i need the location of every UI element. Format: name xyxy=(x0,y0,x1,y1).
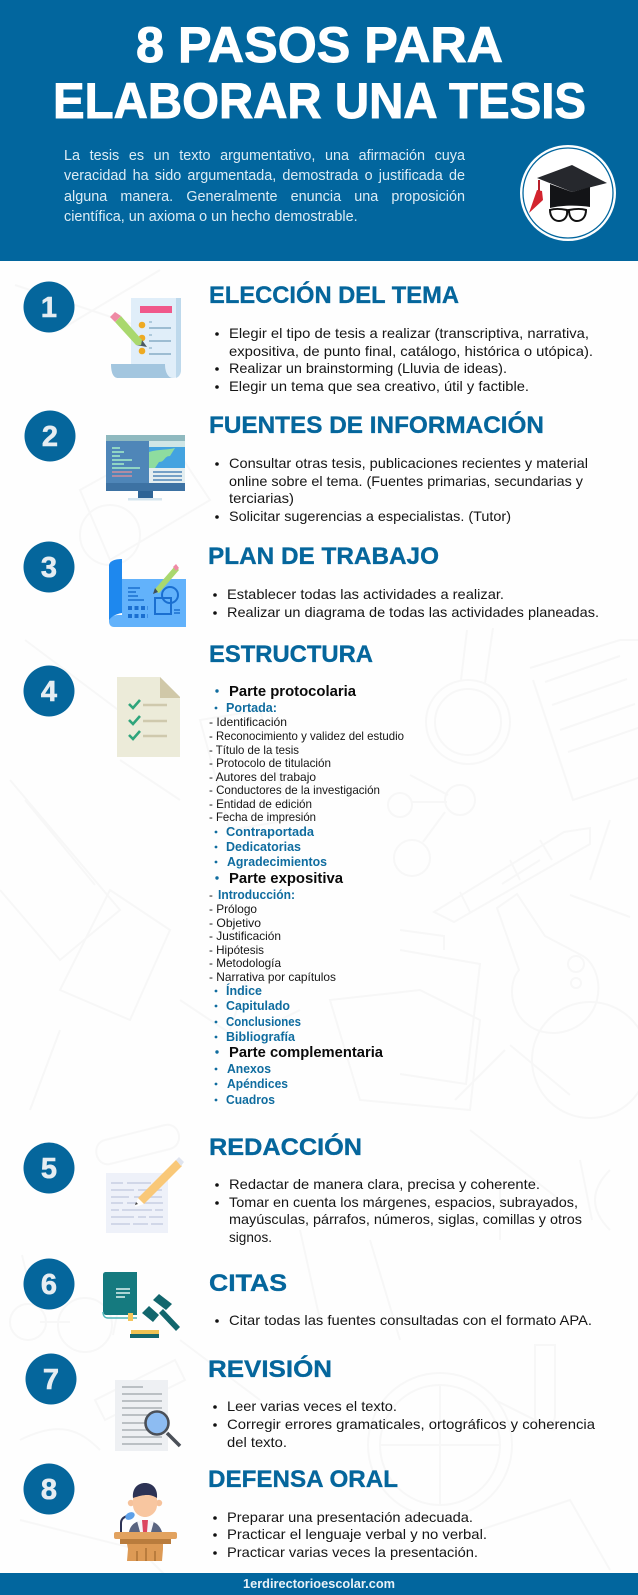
step 7 number: 7 xyxy=(43,1364,59,1396)
section 4 text: Portada: xyxy=(226,701,277,715)
section 4 text: Contraportada xyxy=(226,825,315,839)
icon: speaker at podium xyxy=(114,1483,177,1561)
title xyxy=(53,17,586,129)
section 4 text: - Prólogo xyxy=(209,903,257,916)
section 8 text: Practicar el lenguaje verbal y no verbal. xyxy=(227,1526,487,1542)
icon: document with magnifying glass xyxy=(115,1380,180,1451)
section 5 text: Tomar en cuenta los márgenes, espacios, subrayados, xyxy=(229,1194,578,1210)
section 2 text: terciarias) xyxy=(229,490,294,506)
section 4 text: - Justificación xyxy=(209,930,281,943)
section 5 text: signos. xyxy=(229,1229,272,1245)
section 4 text: - Autores del trabajo xyxy=(209,771,316,784)
section 1 text xyxy=(209,281,593,394)
section 7 text: REVISIÓN xyxy=(208,1355,332,1383)
step 4 number xyxy=(24,666,74,716)
icon: checklist scroll with pencil xyxy=(110,298,181,378)
section 4 text: - Hipótesis xyxy=(209,944,264,957)
title: ELABORAR UNA TESIS xyxy=(53,73,586,129)
section 8 text: DEFENSA ORAL xyxy=(208,1466,398,1493)
section 2 text: Consultar otras tesis, publicaciones recientes y material xyxy=(229,455,588,471)
title: 8 PASOS PARA xyxy=(136,17,503,73)
intro paragraph: La tesis es un texto argumentativo, una afirmación cuya xyxy=(64,148,465,164)
section 4 text: - Identificación xyxy=(209,716,287,729)
section 7 text xyxy=(208,1355,595,1450)
section 5 text: Redactar de manera clara, precisa y coherente. xyxy=(229,1176,540,1192)
section 4 text: Conclusiones xyxy=(226,1015,301,1029)
icon: computer monitor xyxy=(106,435,185,500)
section 6 text: Citar todas las fuentes consultadas con el formato APA. xyxy=(229,1312,592,1328)
step 6 number: 6 xyxy=(41,1269,57,1301)
section 4 text xyxy=(209,641,404,1107)
section 5 text xyxy=(209,1133,582,1245)
section 7 text: Leer varias veces el texto. xyxy=(227,1398,397,1414)
section 4 text: - Reconocimiento y validez del estudio xyxy=(209,730,404,743)
footer band with site name xyxy=(0,1573,638,1595)
step 8 number xyxy=(24,1464,74,1514)
icon: law book and gavel xyxy=(103,1272,180,1338)
section 7 text: del texto. xyxy=(227,1434,287,1450)
section 4 text: - Narrativa por capítulos xyxy=(209,971,336,984)
step 5 number xyxy=(24,1142,74,1194)
section 6 text xyxy=(209,1270,592,1328)
section 4 text: ESTRUCTURA xyxy=(209,641,373,668)
section 4 text: - Fecha de impresión xyxy=(209,811,316,824)
section 4 text: Parte expositiva xyxy=(229,871,344,887)
section 5 text: REDACCIÓN xyxy=(209,1133,362,1161)
section 4 text: Agradecimientos xyxy=(227,855,327,869)
step 6 number xyxy=(24,1258,74,1310)
step 1 number: 1 xyxy=(41,292,57,324)
intro paragraph: científica, un axioma o un hecho demostrable. xyxy=(64,209,358,225)
section 4 text: - xyxy=(209,889,213,902)
intro paragraph xyxy=(64,148,465,225)
step 1 number xyxy=(24,282,74,332)
section 3 text: Realizar un diagrama de todas las actividades planeadas. xyxy=(227,604,599,620)
section 4 text: - Objetivo xyxy=(209,917,261,930)
step 4 number: 4 xyxy=(41,676,57,708)
section 8 text xyxy=(208,1466,487,1560)
section 1 text: ELECCIÓN DEL TEMA xyxy=(209,281,459,309)
section 4 text: Parte protocolaria xyxy=(229,684,357,700)
section 4 text: - Título de la tesis xyxy=(209,744,299,757)
step 7 number xyxy=(26,1354,76,1404)
section 4 text: Índice xyxy=(226,983,262,998)
section 4 text: - Conductores de la investigación xyxy=(209,784,380,797)
step 8 number: 8 xyxy=(41,1474,57,1506)
section 2 text: online sobre el tema. (Fuentes primarias, secundarias y xyxy=(229,473,583,489)
section 2 text: Solicitar sugerencias a especialistas. (Tutor) xyxy=(229,508,511,524)
section 8 text: Preparar una presentación adecuada. xyxy=(227,1509,473,1525)
section 8 text: Practicar varias veces la presentación. xyxy=(227,1544,478,1560)
step 2 number: 2 xyxy=(42,421,58,453)
section 4 text: - Protocolo de titulación xyxy=(209,757,331,770)
section 2 text xyxy=(209,411,588,524)
section 4 text: Capitulado xyxy=(226,999,290,1013)
section 3 text xyxy=(208,543,599,620)
step 5 number: 5 xyxy=(41,1153,57,1185)
section 6 text: CITAS xyxy=(209,1270,287,1297)
step 2 number xyxy=(24,410,76,462)
section 1 text: expositiva, de punto final, catálogo, histórica o utópica). xyxy=(229,343,593,359)
section 4 text: - Entidad de edición xyxy=(209,798,312,811)
step 3 number: 3 xyxy=(41,552,57,584)
icon: document checklist xyxy=(117,677,180,757)
step 3 number xyxy=(24,542,74,592)
section 3 text: PLAN DE TRABAJO xyxy=(208,543,439,570)
section 4 text: Introducción: xyxy=(218,888,295,902)
intro paragraph: veracidad ha sido argumentada, demostrada o justificada de xyxy=(64,168,465,184)
section 4 text: Cuadros xyxy=(226,1093,275,1107)
section 4 text: Parte complementaria xyxy=(229,1045,384,1061)
icon: blueprint with pencil xyxy=(109,559,186,627)
section 7 text: Corregir errores gramaticales, ortográficos y coherencia xyxy=(227,1416,595,1432)
section 5 text: mayúsculas, párrafos, números, siglas, comillas y otros xyxy=(229,1211,582,1227)
section 3 text: Establecer todas las actividades a realizar. xyxy=(227,586,504,602)
header band xyxy=(0,0,638,261)
icon: graduation cap and glasses badge xyxy=(520,145,616,241)
section 1 text: Elegir un tema que sea creativo, útil y factible. xyxy=(229,378,529,394)
section 4 text: Bibliografía xyxy=(226,1030,296,1044)
section 4 text: - Metodología xyxy=(209,957,282,970)
section 2 text: FUENTES DE INFORMACIÓN xyxy=(209,411,544,439)
section 4 text: Anexos xyxy=(227,1062,271,1076)
section 1 text: Elegir el tipo de tesis a realizar (transcriptiva, narrativa, xyxy=(229,325,589,341)
section 4 text: Apéndices xyxy=(227,1077,288,1091)
intro paragraph: alguna manera. Generalmente enuncia una proposición xyxy=(64,189,465,205)
section 1 text: Realizar un brainstorming (Lluvia de ideas). xyxy=(229,360,507,376)
footer band with site name: 1erdirectorioescolar.com xyxy=(243,1576,395,1591)
section 4 text: Dedicatorias xyxy=(226,840,301,854)
icon: text page with pencil xyxy=(106,1157,184,1233)
